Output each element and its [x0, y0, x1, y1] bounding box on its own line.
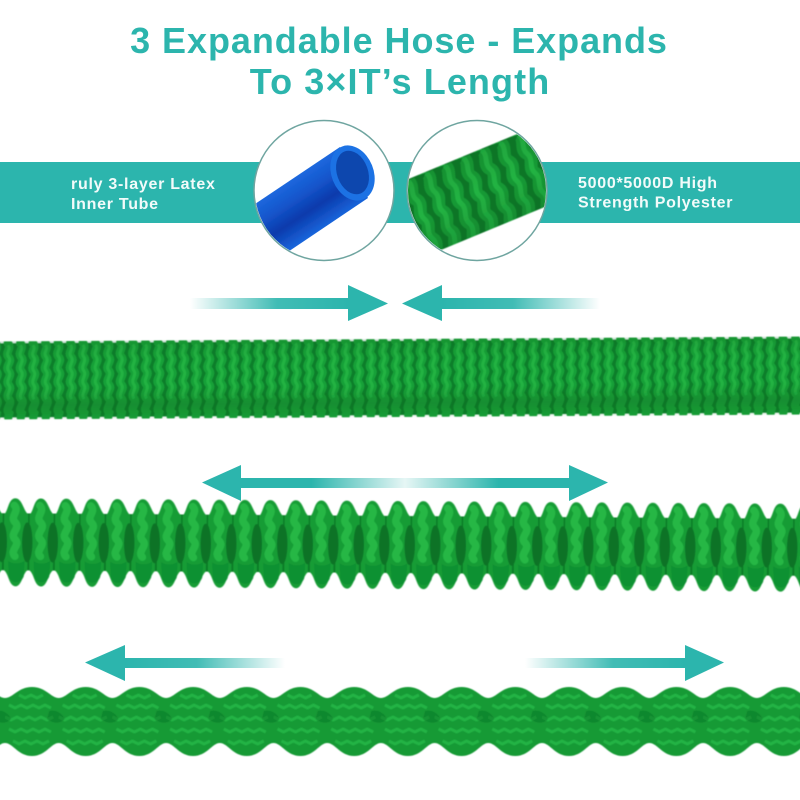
hose: half expanded	[0, 498, 800, 592]
arrow: expand to the left	[85, 645, 285, 681]
right banner text: 5000*5000D High	[578, 175, 718, 192]
left banner text: Inner Tube	[71, 196, 159, 213]
hose: relaxed length	[0, 337, 800, 419]
arrow: compress from left	[190, 285, 388, 321]
title: To 3×IT’s Length	[250, 61, 550, 102]
title	[130, 20, 668, 102]
title: 3 Expandable Hose - Expands	[130, 20, 668, 61]
left banner text: ruly 3-layer Latex	[71, 176, 216, 193]
circle: polyester braided hose	[406, 120, 548, 262]
hose: fully expanded	[0, 687, 800, 756]
circle: blue latex inner tube	[240, 120, 394, 264]
arrow: two-way stretch	[202, 465, 608, 501]
arrow: expand to the right	[525, 645, 724, 681]
right banner text: Strength Polyester	[578, 194, 733, 212]
arrow: compress from right	[402, 285, 600, 321]
teal banner	[0, 162, 800, 223]
